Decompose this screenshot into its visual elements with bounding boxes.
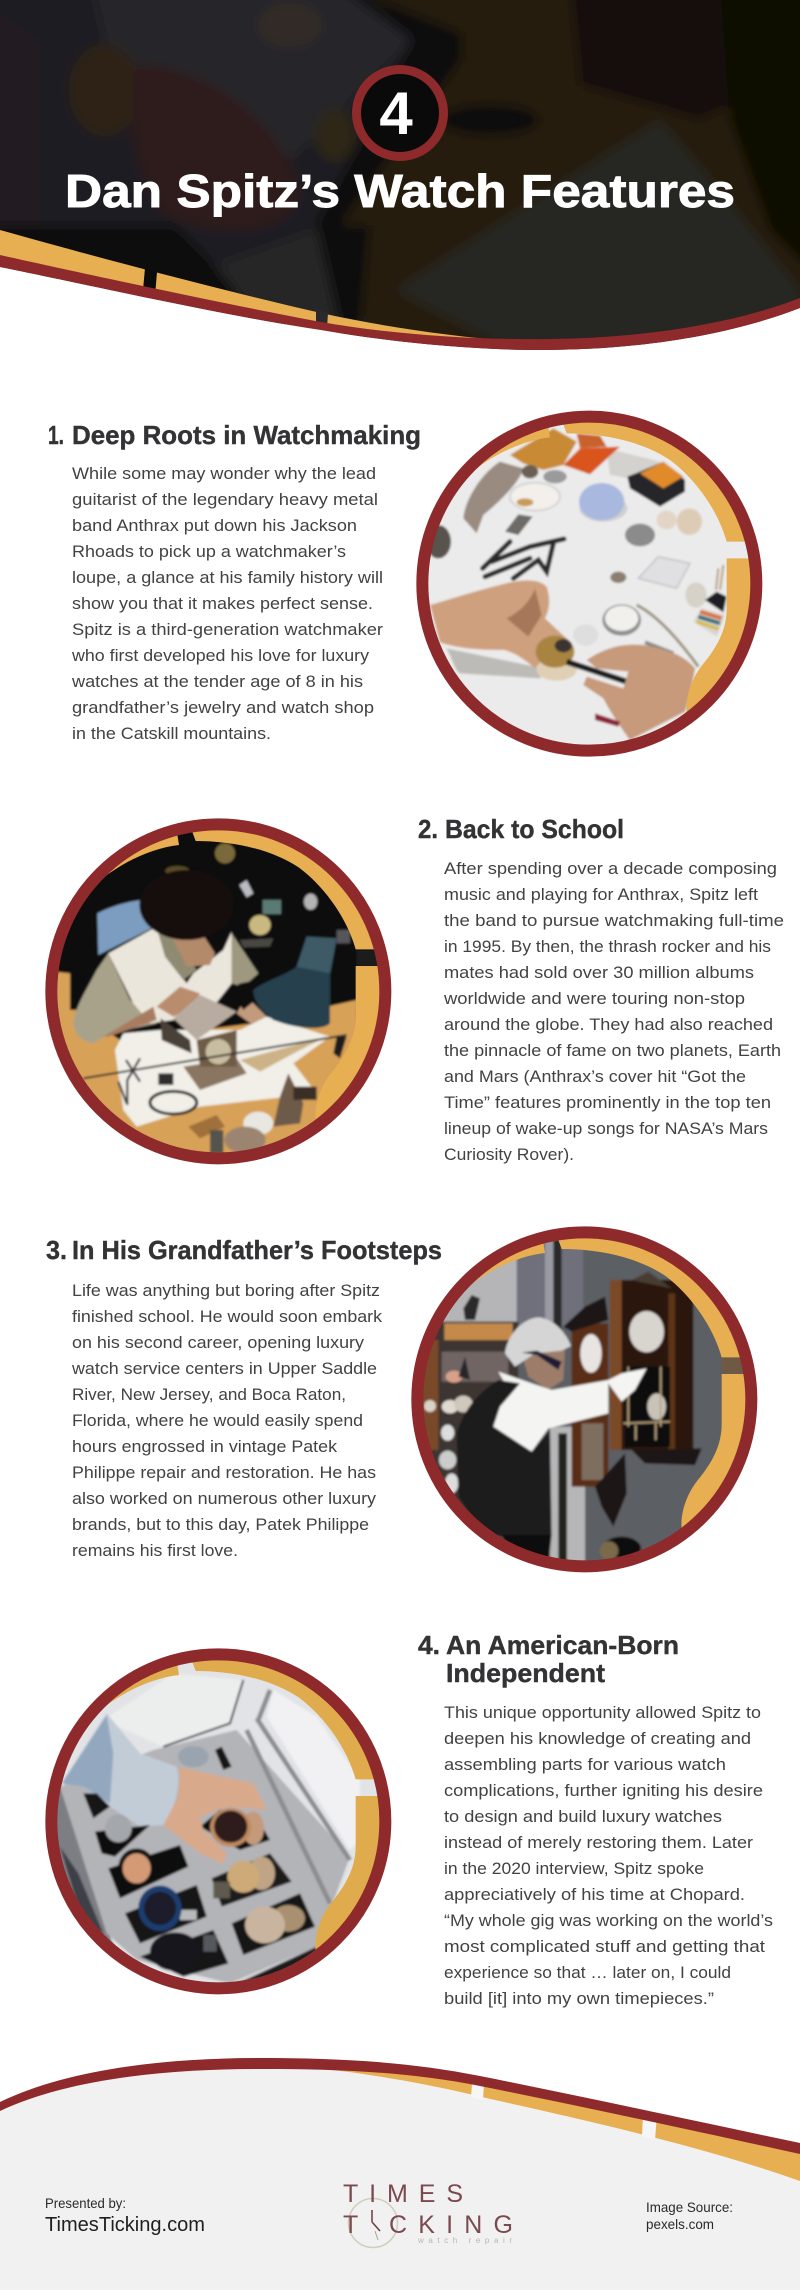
gold accent shapes <box>468 1238 747 1529</box>
dark red wave band <box>0 255 800 350</box>
dark red ring <box>417 1232 751 1566</box>
section 1 body text: grandfather’s jewelry and watch shop <box>72 698 374 717</box>
image source: Image Source: <box>646 2199 733 2215</box>
section 4 body text: This unique opportunity allowed Spitz to <box>444 1703 761 1722</box>
section 4 body text: “My whole gig was working on the world’s <box>444 1911 773 1930</box>
gold accent shapes <box>102 830 381 1121</box>
gold accent shapes <box>102 1660 381 1951</box>
section 4 body text: to design and build luxury watches <box>444 1807 722 1826</box>
section 2 body text: Time” features prominently in the top ten <box>444 1093 771 1112</box>
section 1 body text: show you that it makes perfect sense. <box>72 594 373 613</box>
Times Ticking logo <box>343 2180 513 2248</box>
section 3 heading: 3. <box>46 1235 67 1265</box>
section 4 body text: instead of merely restoring them. Later <box>444 1833 753 1852</box>
section 3 body text: also worked on numerous other luxury <box>72 1489 377 1508</box>
footer <box>0 2058 800 2290</box>
photo content <box>57 1662 378 1982</box>
photo content <box>57 832 378 1152</box>
section 2 body text: Curiosity Rover). <box>444 1145 574 1164</box>
title: Dan Spitz’s Watch Features <box>65 165 735 217</box>
section 2 heading: Back to School <box>445 814 624 844</box>
section 2 body text: in 1995. By then, the thrash rocker and his <box>444 937 771 956</box>
section 4 body text <box>444 1703 773 2008</box>
section 2 body text: mates had sold over 30 million albums <box>444 963 754 982</box>
image source <box>646 2199 733 2232</box>
section 1 body text: in the Catskill mountains. <box>72 724 271 743</box>
dark red ring <box>51 1654 385 1988</box>
section 1 body text: guitarist of the legendary heavy metal <box>72 490 378 509</box>
section 3 body text <box>71 1281 383 1560</box>
section 2 body text: the band to pursue watchmaking full-time <box>444 911 784 930</box>
section 3 body text: River, New Jersey, and Boca Raton, <box>72 1385 346 1404</box>
section 2 circular photo: watchmaker repairing a clock <box>40 810 400 1170</box>
section 3 circular photo: man winding a wall clock <box>405 1220 765 1580</box>
section 2 body text: and Mars (Anthrax’s cover hit “Got the <box>444 1067 746 1086</box>
gold wave band with gaps <box>0 230 560 345</box>
section 4 body text: complications, further igniting his desire <box>444 1781 763 1800</box>
section 2 body text: worldwide and were touring non-stop <box>443 989 745 1008</box>
number badge <box>356 70 444 156</box>
Times Ticking logo: TIMES <box>343 2180 463 2208</box>
section 2: Back to School <box>40 810 784 1170</box>
section 3 body text: remains his first love. <box>72 1541 238 1560</box>
section 4 body text: deepen his knowledge of creating and <box>444 1729 751 1748</box>
section 3 body text: Life was anything but boring after Spitz <box>72 1281 380 1300</box>
section 4 circular photo: hand choosing a watch from a case <box>40 1640 400 2000</box>
presented by: Presented by: <box>45 2195 126 2211</box>
section 1 body text: While some may wonder why the lead <box>72 464 376 483</box>
section 3 body text: watch service centers in Upper Saddle <box>71 1359 377 1378</box>
section 4 heading <box>418 1630 679 1688</box>
section 3 body text: brands, but to this day, Patek Philippe <box>72 1515 369 1534</box>
number badge: 4 <box>379 80 413 147</box>
section 4 body text: experience so that … later on, I could <box>444 1963 731 1982</box>
section 2 body text: the pinnacle of fame on two planets, Earth <box>444 1041 781 1060</box>
section 1 body text: Rhoads to pick up a watchmaker’s <box>72 542 346 561</box>
section 4 body text: in the 2020 interview, Spitz spoke <box>444 1859 704 1878</box>
section 4 body text: most complicated stuff and getting that <box>444 1937 765 1956</box>
footer background <box>0 2069 800 2290</box>
white page curve below header <box>0 267 800 420</box>
section 3 body text: hours engrossed in vintage Patek <box>72 1437 338 1456</box>
dark red ring <box>422 417 756 751</box>
header banner <box>0 0 800 350</box>
image source: pexels.com <box>646 2216 714 2232</box>
section 1 body text <box>71 464 383 743</box>
dark red ring <box>51 824 385 1158</box>
gold accent shapes <box>473 422 752 713</box>
section 1 body text: who first developed his love for luxury <box>71 646 370 665</box>
section 4 heading: 4. <box>418 1630 440 1660</box>
section 4: An American-Born Independent <box>40 1630 773 2008</box>
photo content <box>423 1240 744 1560</box>
photo content <box>428 425 748 744</box>
section 1 body text: watches at the tender age of 8 in his <box>71 672 363 691</box>
section 3: In His Grandfather's Footsteps <box>46 1220 765 1580</box>
section 1 circular photo: watchmaker's hands on white table <box>410 405 770 765</box>
gold wave band with gaps <box>295 2066 800 2181</box>
section 3 heading: In His Grandfather’s Footsteps <box>72 1235 442 1265</box>
section 3 body text: finished school. He would soon embark <box>72 1307 383 1326</box>
section 2 body text: lineup of wake-up songs for NASA’s Mars <box>444 1119 768 1138</box>
Times Ticking logo: watch repair <box>417 2236 512 2245</box>
section 1 heading: Deep Roots in Watchmaking <box>72 420 421 450</box>
section 4 body text: build [it] into my own timepieces.” <box>444 1989 714 2008</box>
section 1 body text: band Anthrax put down his Jackson <box>72 516 357 535</box>
Times Ticking logo: CKING <box>389 2211 513 2239</box>
section 2 body text: After spending over a decade composing <box>444 859 777 878</box>
presented by <box>45 2195 205 2236</box>
dark red wave band <box>0 2058 800 2154</box>
header background photo <box>0 0 800 380</box>
section 3 body text: Philippe repair and restoration. He has <box>72 1463 376 1482</box>
section 4 body text: appreciatively of his time at Chopard. <box>444 1885 745 1904</box>
section 2 heading: 2. <box>418 814 438 844</box>
section 4 heading: Independent <box>446 1658 605 1688</box>
Times Ticking logo: T <box>343 2211 358 2239</box>
section 1 body text: Spitz is a third-generation watchmaker <box>72 620 383 639</box>
section 1: Deep Roots in Watchmaking <box>48 405 770 765</box>
section 4 body text: assembling parts for various watch <box>444 1755 726 1774</box>
section 3 body text: Florida, where he would easily spend <box>72 1411 363 1430</box>
section 4 heading: An American-Born <box>446 1630 679 1660</box>
section 2 body text: music and playing for Anthrax, Spitz left <box>444 885 758 904</box>
section 3 body text: on his second career, opening luxury <box>72 1333 365 1352</box>
section 1 body text: loupe, a glance at his family history will <box>72 568 383 587</box>
section 2 body text: around the globe. They had also reached <box>444 1015 773 1034</box>
section 2 body text <box>443 859 784 1164</box>
section 1 heading: 1. <box>48 420 64 450</box>
presented by: TimesTicking.com <box>45 2214 205 2236</box>
